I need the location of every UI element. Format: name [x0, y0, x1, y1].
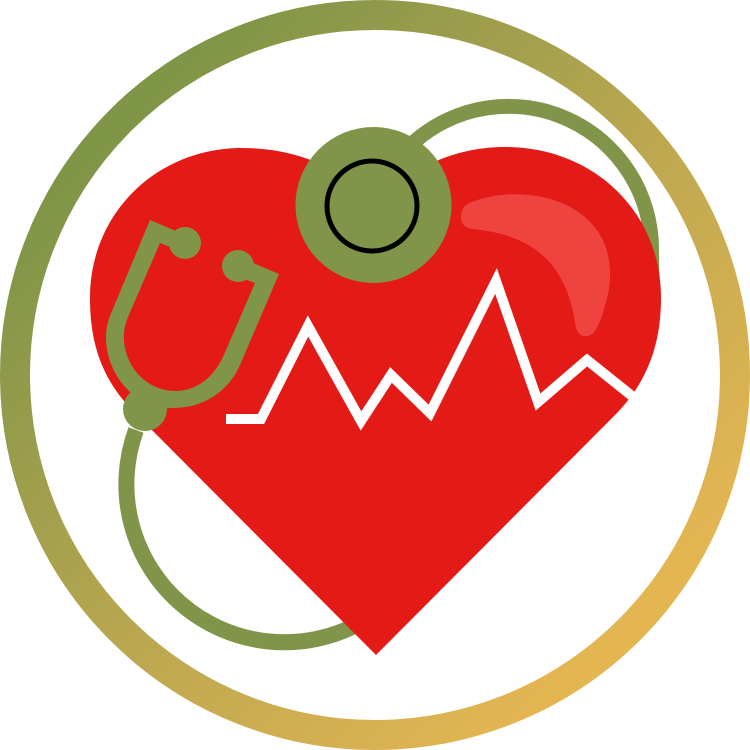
left ear tip — [169, 227, 201, 259]
chest piece outer disk — [296, 127, 452, 283]
stethoscope tube: lower left loop — [126, 430, 360, 642]
stethoscope chest piece — [296, 127, 452, 283]
right ear tip — [222, 250, 254, 282]
heart — [90, 147, 661, 655]
stethoscope headset — [106, 220, 279, 431]
heartbeat line — [226, 281, 632, 421]
headset arms — [106, 220, 279, 408]
chest piece inner ring — [327, 161, 417, 251]
heart highlight — [461, 194, 610, 336]
headset joint — [123, 387, 167, 431]
stethoscope tube: upper right loop — [414, 106, 652, 290]
